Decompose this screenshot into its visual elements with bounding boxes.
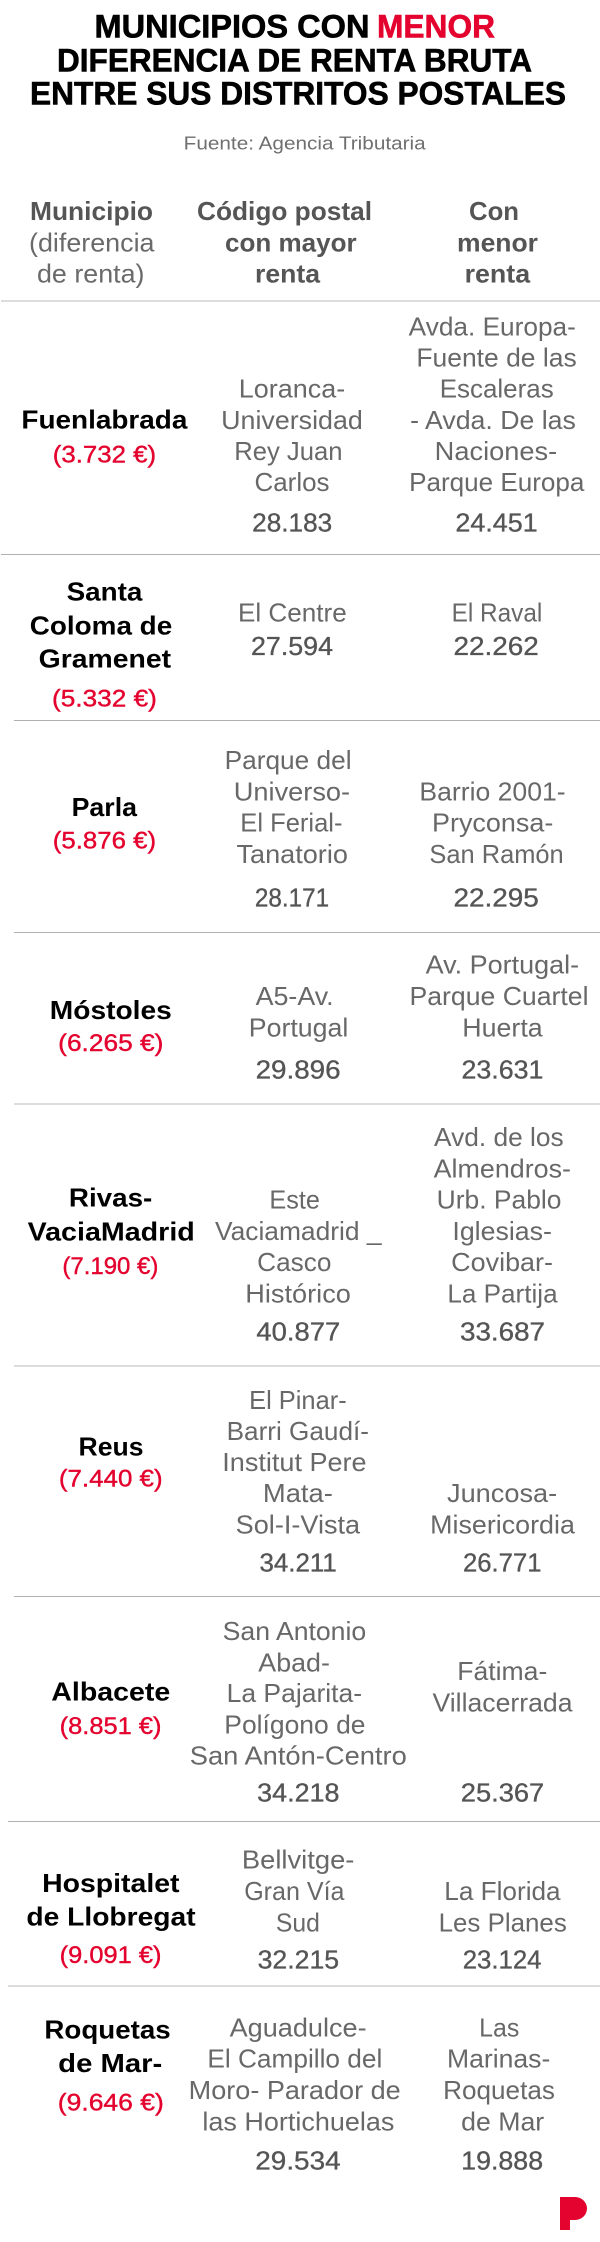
row: Albacete bbox=[51, 1616, 573, 1807]
municipality: (9.646 €) bbox=[58, 2089, 164, 2116]
row: Reus bbox=[59, 1385, 575, 1578]
highest income postal code: 28.183 bbox=[252, 508, 332, 538]
highest income postal code: 34.211 bbox=[260, 1548, 337, 1578]
header: menor renta: Con bbox=[469, 196, 519, 226]
municipality bbox=[30, 577, 172, 713]
highest income postal code bbox=[222, 1385, 369, 1578]
header: menor renta bbox=[457, 196, 538, 289]
municipality: Fuenlabrada bbox=[21, 404, 188, 434]
municipality: de Mar- bbox=[58, 2048, 162, 2078]
municipality: (7.440 €) bbox=[59, 1466, 163, 1493]
lowest income postal code: Huerta bbox=[462, 1013, 543, 1043]
highest income postal code: 28.171 bbox=[255, 883, 329, 913]
lowest income postal code: Escaleras bbox=[440, 374, 554, 404]
highest income postal code: San Antonio bbox=[223, 1616, 366, 1646]
row: Hospitalet de Llobregat bbox=[26, 1845, 567, 1975]
lowest income postal code: - Avda. De las bbox=[410, 405, 576, 435]
highest income postal code: Casco bbox=[257, 1247, 331, 1277]
lowest income postal code: Parque Europa bbox=[409, 467, 585, 497]
municipality: (6.265 €) bbox=[58, 1030, 163, 1057]
lowest income postal code: 22.262 bbox=[454, 631, 539, 661]
lowest income postal code bbox=[452, 598, 542, 661]
municipality bbox=[21, 404, 188, 468]
municipality: Hospitalet bbox=[42, 1868, 180, 1898]
municipality: Reus bbox=[78, 1432, 144, 1462]
lowest income postal code: Las bbox=[479, 2012, 519, 2042]
municipality: Santa bbox=[67, 577, 143, 607]
lowest income postal code bbox=[409, 311, 585, 538]
header: mayor renta: Código postal bbox=[197, 196, 372, 226]
header: mayor renta bbox=[197, 196, 372, 289]
highest income postal code: 32.215 bbox=[258, 1945, 339, 1975]
lowest income postal code: San Ramón bbox=[429, 839, 564, 869]
header: municipio: Municipio bbox=[30, 196, 153, 226]
highest income postal code: Sud bbox=[276, 1907, 320, 1937]
lowest income postal code: La Partija bbox=[447, 1278, 558, 1308]
highest income postal code: El Campillo del bbox=[207, 2044, 382, 2074]
municipality bbox=[28, 1183, 195, 1280]
highest income postal code: Tanatorio bbox=[236, 839, 348, 869]
header: mayor renta: renta bbox=[255, 259, 321, 289]
highest income postal code: 34.218 bbox=[257, 1777, 340, 1807]
row: Parla bbox=[53, 745, 566, 913]
lowest income postal code: 26.771 bbox=[463, 1548, 542, 1578]
lowest income postal code: Naciones- bbox=[435, 436, 557, 466]
highest income postal code: Este bbox=[269, 1185, 320, 1215]
highest income postal code: El Pinar- bbox=[249, 1385, 347, 1415]
lowest income postal code: Villacerrada bbox=[432, 1687, 573, 1717]
title: ENTRE SUS DISTRITOS POSTALES bbox=[30, 76, 566, 112]
title: MUNICIPIOS CON bbox=[94, 9, 370, 45]
lowest income postal code: Parque Cuartel bbox=[410, 981, 588, 1011]
lowest income postal code: Barrio 2001- bbox=[419, 776, 566, 806]
header: municipio bbox=[29, 196, 155, 289]
highest income postal code: 29.896 bbox=[256, 1054, 341, 1084]
municipality: (5.876 €) bbox=[53, 827, 156, 854]
lowest income postal code: Pryconsa- bbox=[432, 808, 553, 838]
highest income postal code: Moro- Parador de bbox=[189, 2075, 401, 2105]
highest income postal code: Polígono de bbox=[224, 1709, 366, 1739]
highest income postal code: Loranca- bbox=[239, 374, 345, 404]
highest income postal code: 40.877 bbox=[256, 1317, 340, 1347]
municipality bbox=[53, 792, 156, 854]
lowest income postal code: Marinas- bbox=[447, 2044, 550, 2074]
icon: P logo bbox=[560, 2197, 587, 2230]
municipality: Coloma de bbox=[30, 610, 172, 640]
highest income postal code: El Centre bbox=[238, 598, 347, 628]
lowest income postal code bbox=[419, 776, 566, 913]
title: MENOR bbox=[377, 9, 495, 45]
header: menor renta: menor bbox=[457, 228, 538, 258]
row: Fuenlabrada bbox=[21, 311, 585, 538]
header: mayor renta: con mayor bbox=[225, 228, 357, 258]
lowest income postal code: La Florida bbox=[444, 1876, 561, 1906]
lowest income postal code bbox=[432, 1656, 573, 1807]
lowest income postal code: Covibar- bbox=[451, 1247, 553, 1277]
highest income postal code: Parque del bbox=[225, 745, 352, 775]
lowest income postal code: El Raval bbox=[452, 598, 542, 628]
municipality: de Llobregat bbox=[26, 1902, 196, 1932]
lowest income postal code: 24.451 bbox=[455, 508, 538, 538]
source: Fuente: Agencia Tributaria bbox=[184, 133, 427, 153]
highest income postal code bbox=[242, 1845, 354, 1975]
municipality: (7.190 €) bbox=[62, 1253, 158, 1280]
highest income postal code: El Ferial- bbox=[240, 808, 342, 838]
municipality: VaciaMadrid bbox=[28, 1216, 195, 1246]
lowest income postal code: Juncosa- bbox=[447, 1478, 557, 1508]
municipality bbox=[51, 1677, 170, 1740]
lowest income postal code: Iglesias- bbox=[452, 1216, 552, 1246]
lowest income postal code: Avda. Europa- bbox=[409, 311, 576, 341]
highest income postal code: Portugal bbox=[249, 1013, 348, 1043]
highest income postal code: Vaciamadrid _ bbox=[215, 1216, 382, 1246]
municipality: (3.732 €) bbox=[53, 441, 156, 468]
lowest income postal code bbox=[434, 1122, 571, 1347]
highest income postal code: Gran Vía bbox=[244, 1876, 345, 1906]
lowest income postal code: 25.367 bbox=[461, 1777, 544, 1807]
municipality bbox=[59, 1432, 163, 1493]
highest income postal code bbox=[221, 374, 363, 538]
row: Rivas-VaciaMadrid bbox=[28, 1122, 571, 1347]
lowest income postal code: 23.631 bbox=[462, 1054, 543, 1084]
lowest income postal code: 23.124 bbox=[463, 1945, 542, 1975]
lowest income postal code: Urb. Pablo bbox=[437, 1185, 562, 1215]
lowest income postal code: Avd. de los bbox=[434, 1122, 564, 1152]
row: Móstoles bbox=[50, 950, 589, 1084]
lowest income postal code: Misericordia bbox=[430, 1509, 575, 1539]
highest income postal code: las Hortichuelas bbox=[202, 2106, 394, 2136]
lowest income postal code: Roquetas bbox=[443, 2075, 555, 2105]
municipality: Albacete bbox=[51, 1677, 170, 1707]
highest income postal code: La Pajarita- bbox=[227, 1678, 362, 1708]
header: municipio: (diferencia bbox=[29, 228, 155, 258]
highest income postal code: Bellvitge- bbox=[242, 1845, 354, 1875]
highest income postal code: 29.534 bbox=[255, 2145, 341, 2175]
lowest income postal code bbox=[430, 1478, 575, 1578]
highest income postal code bbox=[225, 745, 352, 913]
header: menor renta: renta bbox=[465, 259, 531, 289]
lowest income postal code bbox=[410, 950, 588, 1084]
lowest income postal code: Les Planes bbox=[439, 1907, 567, 1937]
lowest income postal code: 33.687 bbox=[460, 1317, 545, 1347]
lowest income postal code: Fuente de las bbox=[416, 343, 577, 373]
highest income postal code: Aguadulce- bbox=[230, 2012, 367, 2042]
highest income postal code: Universo- bbox=[234, 776, 350, 806]
municipality: Parla bbox=[72, 792, 138, 822]
municipality: Rivas- bbox=[69, 1183, 152, 1213]
table header bbox=[29, 196, 538, 289]
lowest income postal code: 19.888 bbox=[461, 2145, 543, 2175]
lowest income postal code: Av. Portugal- bbox=[426, 950, 579, 980]
lowest income postal code: Fátima- bbox=[457, 1656, 547, 1686]
highest income postal code: A5-Av. bbox=[256, 981, 334, 1011]
highest income postal code: Sol-I-Vista bbox=[236, 1509, 361, 1539]
title bbox=[30, 9, 566, 112]
lowest income postal code: de Mar bbox=[461, 2106, 545, 2136]
highest income postal code: San Antón-Centro bbox=[190, 1741, 407, 1771]
header: municipio: de renta) bbox=[37, 259, 144, 289]
highest income postal code: Abad- bbox=[258, 1647, 330, 1677]
municipality bbox=[44, 2014, 171, 2116]
highest income postal code bbox=[238, 598, 347, 661]
lowest income postal code: Almendros- bbox=[434, 1153, 571, 1183]
row: Roquetas de Mar bbox=[44, 2012, 555, 2175]
lowest income postal code: 22.295 bbox=[454, 883, 539, 913]
highest income postal code: Barri Gaudí- bbox=[227, 1416, 369, 1446]
highest income postal code bbox=[189, 2012, 401, 2175]
highest income postal code: 27.594 bbox=[251, 631, 333, 661]
municipality bbox=[50, 995, 172, 1057]
highest income postal code bbox=[249, 981, 348, 1084]
highest income postal code: Carlos bbox=[254, 467, 330, 497]
municipality: (5.332 €) bbox=[52, 686, 157, 713]
highest income postal code bbox=[190, 1616, 407, 1807]
municipality: (8.851 €) bbox=[60, 1713, 162, 1740]
municipality: Móstoles bbox=[50, 995, 172, 1025]
highest income postal code: Histórico bbox=[245, 1278, 351, 1308]
municipality: Roquetas bbox=[44, 2014, 171, 2044]
lowest income postal code bbox=[443, 2012, 555, 2175]
municipality bbox=[26, 1868, 196, 1969]
title: DIFERENCIA DE RENTA BRUTA bbox=[57, 42, 532, 78]
row: Santa Coloma de Gramenet bbox=[30, 577, 542, 713]
highest income postal code: Rey Juan bbox=[234, 436, 342, 466]
municipality: (9.091 €) bbox=[60, 1942, 162, 1969]
municipality: Gramenet bbox=[39, 644, 171, 674]
highest income postal code: Mata- bbox=[263, 1478, 333, 1508]
highest income postal code: Institut Pere bbox=[222, 1447, 367, 1477]
lowest income postal code bbox=[439, 1876, 567, 1975]
highest income postal code bbox=[215, 1185, 382, 1347]
highest income postal code: Universidad bbox=[221, 405, 363, 435]
